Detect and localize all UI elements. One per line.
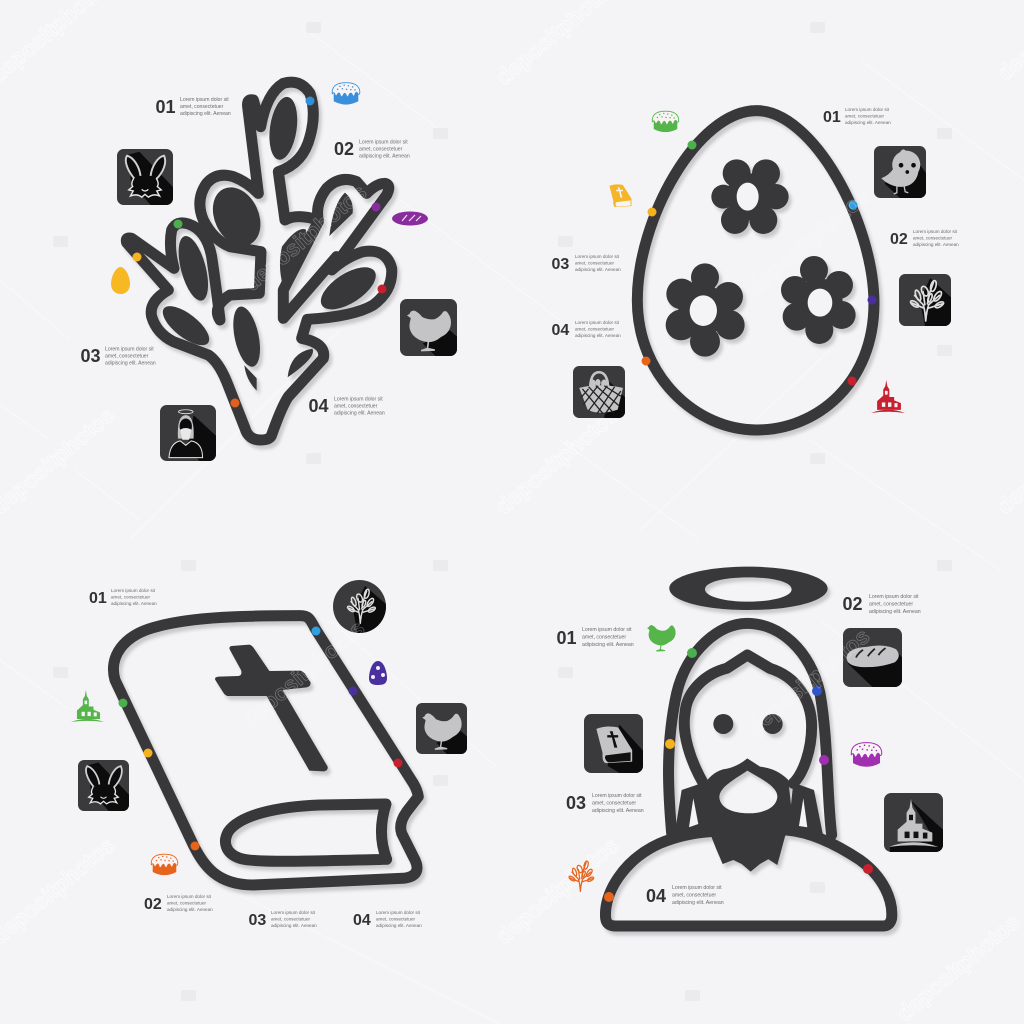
- watermark pattern: depositphotos: [491, 402, 623, 519]
- legend 01: adipiscing elit. Aenean: [111, 601, 157, 606]
- legend 04: [353, 910, 422, 929]
- watermark pattern: depositphotos: [491, 832, 623, 949]
- legend 03: amet, consectetuer: [575, 260, 615, 266]
- legend 02: Lorem ipsum dolor sit: [869, 594, 919, 600]
- icon: egg purple: [369, 661, 387, 685]
- icon tile: basket: [573, 366, 625, 418]
- colored markers: [604, 648, 873, 902]
- legend 02: adipiscing elit. Aenean: [913, 242, 959, 247]
- icon tile: hen: [416, 703, 467, 754]
- legend 02: adipiscing elit. Aenean: [869, 609, 921, 615]
- legend 03: amet, consectetuer: [271, 916, 311, 922]
- icon tile: rabbit: [117, 149, 173, 205]
- legend 03: adipiscing elit. Aenean: [592, 808, 644, 814]
- legend 03: 03: [248, 912, 266, 929]
- icon tile: willow: [899, 274, 951, 326]
- legend 04: 04: [552, 322, 569, 339]
- legend 03: [248, 910, 317, 929]
- legend 02: 02: [144, 896, 162, 913]
- legend 03: adipiscing elit. Aenean: [105, 360, 156, 366]
- legend 02: [842, 594, 921, 615]
- icon tile: rabbit: [78, 760, 129, 811]
- legend 01: Lorem ipsum dolor sit: [845, 107, 890, 112]
- icon: bible yellow: [609, 184, 632, 207]
- legend 04: adipiscing elit. Aenean: [575, 333, 621, 338]
- icon tile: bread: [843, 628, 902, 687]
- legend 04: 04: [308, 396, 329, 416]
- icon tile: bible: [584, 714, 643, 773]
- legend 02: Lorem ipsum dolor sit: [913, 229, 958, 234]
- legend 01: Lorem ipsum dolor sit: [582, 627, 632, 633]
- icon: cake blue: [332, 83, 360, 105]
- watermark overlay: depositphotos: [742, 623, 874, 740]
- willow outline and catkins: [126, 82, 392, 440]
- legend 04: amet, consectetuer: [575, 326, 615, 332]
- book outline and cross: [113, 616, 418, 885]
- legend 03: Lorem ipsum dolor sit: [271, 910, 316, 915]
- watermark pattern: depositphotos: [892, 909, 1024, 1024]
- legend 02: Lorem ipsum dolor sit: [167, 894, 212, 899]
- legend 04: [308, 396, 385, 416]
- legend 03: 03: [80, 346, 101, 366]
- icon tile: willow circle: [333, 580, 386, 633]
- panel: decorated egg: [552, 107, 959, 430]
- figure outline, halo, face and beard: [605, 567, 892, 926]
- icon tile: hen: [400, 299, 457, 356]
- legend 01: [556, 627, 634, 648]
- icon tile: chick: [874, 146, 926, 198]
- legend 03: [566, 793, 644, 814]
- legend 04: Lorem ipsum dolor sit: [672, 885, 722, 891]
- legend 01: Lorem ipsum dolor sit: [111, 588, 156, 593]
- icon: church green: [71, 690, 104, 722]
- legend 01: 01: [89, 590, 107, 607]
- egg outline and flowers: [637, 111, 874, 430]
- legend 02: Lorem ipsum dolor sit: [359, 140, 408, 146]
- icon: cake purple: [851, 743, 882, 767]
- legend 02: adipiscing elit. Aenean: [359, 154, 410, 160]
- colored markers: [132, 96, 386, 408]
- legend 04: adipiscing elit. Aenean: [376, 923, 422, 928]
- legend 01: amet, consectetuer: [582, 634, 626, 640]
- legend 01: 01: [823, 109, 841, 126]
- legend 02: adipiscing elit. Aenean: [167, 907, 213, 912]
- legend 02: [334, 139, 410, 160]
- legend 03: Lorem ipsum dolor sit: [575, 254, 620, 259]
- legend 01: adipiscing elit. Aenean: [180, 111, 231, 117]
- legend 03: Lorem ipsum dolor sit: [105, 346, 154, 352]
- icon: bread purple: [392, 212, 428, 226]
- legend 03: 03: [552, 256, 569, 273]
- legend 01: amet, consectetuer: [180, 104, 224, 110]
- legend 02: amet, consectetuer: [167, 900, 207, 906]
- legend 04: Lorem ipsum dolor sit: [376, 910, 421, 915]
- legend 04: [646, 885, 724, 906]
- legend 02: amet, consectetuer: [359, 146, 403, 152]
- legend 02: amet, consectetuer: [869, 602, 913, 608]
- legend 03: adipiscing elit. Aenean: [575, 267, 621, 272]
- legend 03: [80, 346, 156, 366]
- legend 03: adipiscing elit. Aenean: [271, 923, 317, 928]
- legend 04: 04: [646, 886, 666, 906]
- legend 04: adipiscing elit. Aenean: [672, 900, 724, 906]
- legend 01: amet, consectetuer: [845, 114, 885, 118]
- legend 04: amet, consectetuer: [376, 916, 416, 922]
- legend 04: Lorem ipsum dolor sit: [575, 320, 620, 325]
- legend 04: 04: [353, 912, 371, 929]
- panel: haloed figure: [556, 567, 943, 926]
- icon tile: church: [884, 793, 943, 852]
- legend 01: [823, 107, 891, 126]
- icon: cake green: [652, 111, 679, 132]
- legend 04: amet, consectetuer: [334, 404, 378, 410]
- watermark overlay: depositphotos: [742, 183, 874, 300]
- legend 02: [890, 229, 959, 248]
- legend 04: Lorem ipsum dolor sit: [334, 396, 383, 402]
- icon: hen green: [647, 625, 676, 651]
- legend 01: adipiscing elit. Aenean: [845, 120, 891, 125]
- legend 04: amet, consectetuer: [672, 892, 716, 898]
- legend 02: [144, 894, 213, 913]
- legend 01: 01: [556, 628, 577, 648]
- legend 02: amet, consectetuer: [913, 236, 953, 240]
- icon: willow orange: [568, 861, 594, 891]
- legend 03: amet, consectetuer: [105, 354, 149, 360]
- legend 01: [156, 97, 231, 117]
- icon: cake orange: [151, 854, 178, 875]
- legend 01: amet, consectetuer: [111, 594, 151, 600]
- legend 02: 02: [334, 139, 354, 159]
- legend 03: [552, 254, 621, 273]
- icon: egg yellow: [111, 267, 130, 294]
- legend 04: adipiscing elit. Aenean: [334, 410, 385, 416]
- legend 01: [89, 588, 157, 607]
- watermark overlay: [237, 179, 874, 740]
- legend 04: [552, 320, 621, 339]
- legend 01: Lorem ipsum dolor sit: [180, 97, 229, 103]
- watermark overlay: depositphotos: [237, 615, 369, 732]
- icon: church red: [871, 380, 905, 413]
- legend 03: 03: [566, 793, 586, 813]
- legend 03: amet, consectetuer: [592, 800, 636, 806]
- legend 01: adipiscing elit. Aenean: [582, 642, 634, 648]
- legend 02: 02: [842, 594, 863, 614]
- icon tile: haloed figure: [160, 405, 216, 461]
- legend 03: Lorem ipsum dolor sit: [592, 793, 642, 799]
- colored markers: [118, 626, 402, 850]
- watermark overlay: depositphotos: [239, 179, 371, 296]
- panel: willow branch: [80, 82, 457, 461]
- panel: bible: [71, 580, 467, 929]
- legend 02: 02: [890, 231, 908, 248]
- legend 01: 01: [156, 97, 176, 117]
- colored markers: [642, 140, 876, 386]
